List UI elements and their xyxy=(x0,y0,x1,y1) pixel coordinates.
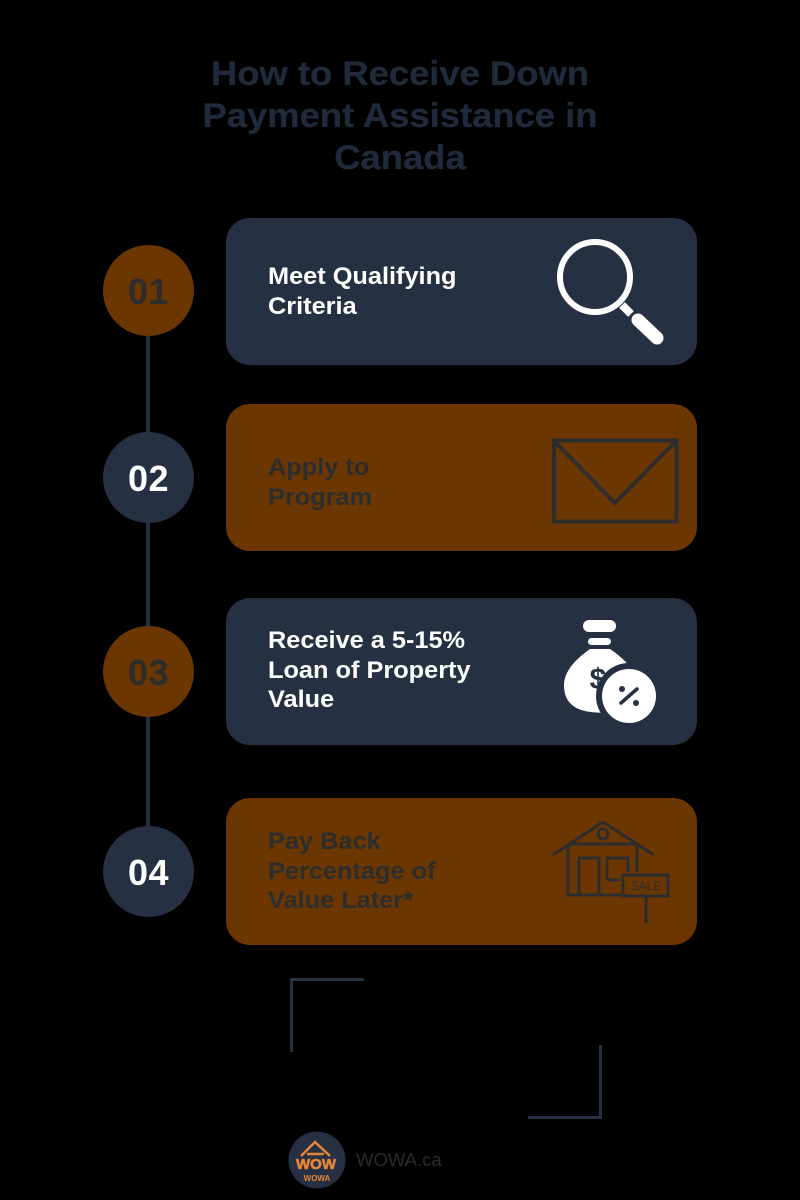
logo: WOWA house badge: WOW xyxy=(296,1156,337,1173)
logo: WOWA house badge xyxy=(288,1132,346,1188)
step 1 text xyxy=(268,263,457,320)
icon: envelope xyxy=(552,438,678,524)
frame bracket: bottom right xyxy=(528,1045,602,1119)
title xyxy=(203,55,597,177)
logo text: WOWA.ca xyxy=(356,1149,442,1170)
step number 02: 02 xyxy=(128,458,169,499)
step 2 text: Program xyxy=(268,484,372,510)
step 2 text: Apply to xyxy=(268,454,369,481)
logo: WOWA house badge: WOWA xyxy=(304,1174,331,1183)
step 3 text xyxy=(268,627,471,713)
panel: step 1 xyxy=(226,218,697,365)
step 3 text: Loan of Property xyxy=(268,656,471,684)
icon: magnifying glass xyxy=(557,239,664,344)
step number 04: 04 xyxy=(128,852,169,893)
icon: money bag with percent xyxy=(564,620,656,723)
frame bracket: top left xyxy=(290,978,364,1052)
panel: step 4 xyxy=(226,798,697,945)
step 4 text: Percentage of xyxy=(268,858,435,884)
step 4 text xyxy=(268,828,436,914)
title: Payment Assistance in xyxy=(203,97,597,135)
step number 02 xyxy=(103,432,194,523)
step number 03 xyxy=(103,626,194,717)
step number 01: 01 xyxy=(128,271,169,312)
timeline connector xyxy=(146,330,150,840)
panel: step 3 xyxy=(226,598,697,745)
step 3 text: Receive a 5-15% xyxy=(268,627,465,654)
step 3 text: Value xyxy=(268,686,334,713)
title: How to Receive Down xyxy=(211,55,589,93)
step number 04 xyxy=(103,826,194,917)
step 4 text: Pay Back xyxy=(268,828,381,855)
step 4 text: Value Later* xyxy=(268,887,413,914)
title: Canada xyxy=(334,139,466,177)
panel: step 2 xyxy=(226,404,697,551)
step number 03: 03 xyxy=(128,652,169,693)
step 1 text: Meet Qualifying xyxy=(268,263,457,290)
icon: money bag with percent: $ xyxy=(590,663,607,696)
icon: house for sale: SALE xyxy=(631,879,661,893)
step 2 text xyxy=(268,454,372,510)
icon: house for sale xyxy=(552,820,670,923)
step 1 text: Criteria xyxy=(268,292,357,320)
step number 01 xyxy=(103,245,194,336)
